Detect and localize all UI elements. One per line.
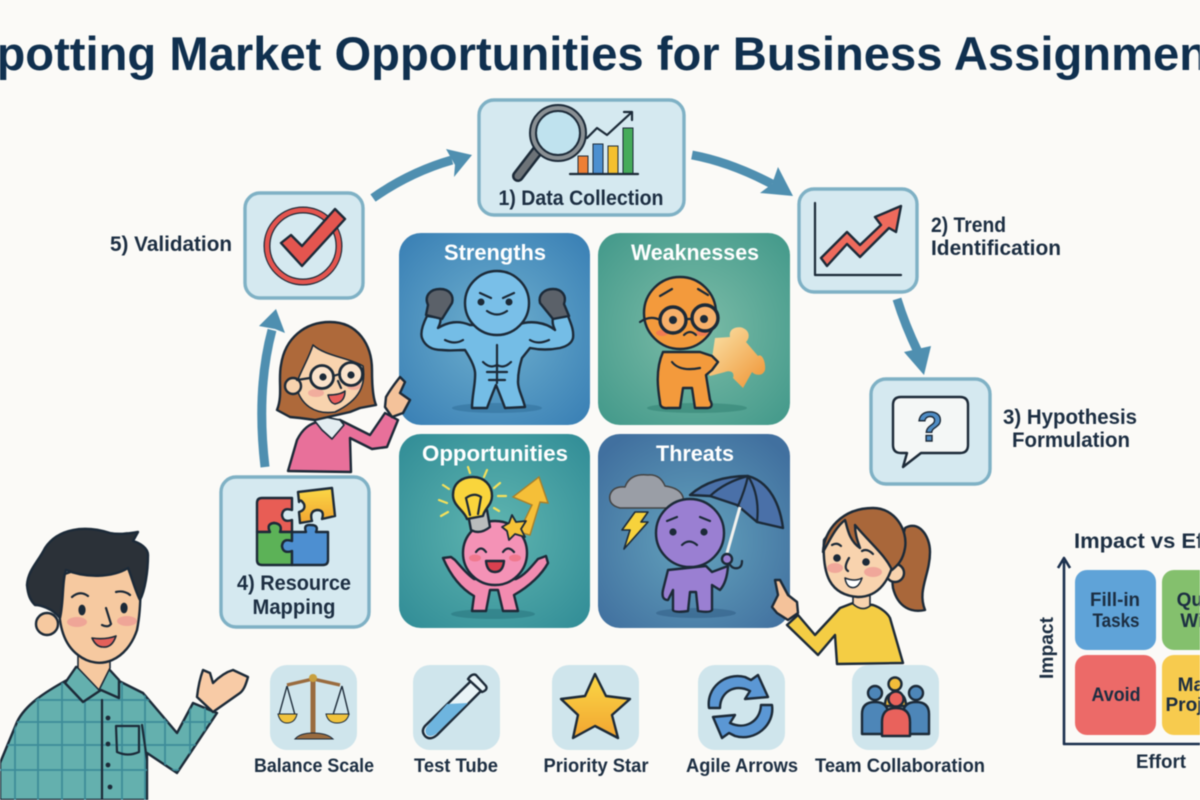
arrow: trend identification to hypothesis	[897, 299, 931, 375]
panel: step 3 hypothesis formulation	[871, 379, 990, 484]
heading: Threats	[656, 441, 734, 466]
character: woman with ponytail pointing	[772, 508, 930, 664]
label: team collaboration: Team Collaboration	[815, 756, 985, 777]
icon tile: test tube	[413, 665, 500, 750]
sweater	[787, 603, 903, 664]
label: step 3	[1003, 406, 1137, 452]
arrow: data collection to trend identification	[692, 155, 793, 196]
character: pink figure with bulb, star, arrow	[439, 467, 548, 619]
panel: step 2 trend identification	[799, 189, 917, 292]
icon: magnifying glass	[518, 108, 583, 176]
cell: fill-in tasks: Tasks	[1092, 611, 1140, 632]
character: purple figure with storm and umbrella	[610, 475, 783, 618]
cell: major projects	[1162, 655, 1200, 735]
label: agile arrows: Agile Arrows	[686, 756, 798, 777]
hand	[385, 377, 410, 417]
hand	[197, 670, 248, 712]
panel: threats	[598, 434, 790, 628]
icon tile: agile arrows	[698, 665, 785, 750]
plaid lines	[0, 680, 220, 800]
step label: Mapping	[252, 596, 336, 619]
character: muscular blue figure	[421, 271, 573, 413]
shirt	[0, 680, 217, 800]
label: step 5: 5) Validation	[110, 233, 232, 256]
cell: avoid	[1075, 655, 1156, 735]
axis label: effort: Effort	[1136, 752, 1187, 773]
icon: rising trend arrow	[815, 203, 901, 275]
icon: question speech bubble: ?	[917, 403, 943, 450]
label: balance scale: Balance Scale	[254, 756, 374, 777]
step label	[237, 572, 351, 619]
icon tile: balance scale	[270, 665, 357, 750]
label: priority star: Priority Star	[544, 756, 649, 777]
axes	[1058, 558, 1200, 744]
icon: umbrella	[690, 476, 783, 568]
character: man in plaid shirt	[0, 529, 248, 800]
label: step 2: Identification	[931, 237, 1061, 260]
icon tile: priority star	[552, 665, 639, 750]
character: orange figure with glasses and puzzle piece	[640, 277, 765, 413]
face	[296, 345, 364, 413]
icon: red check mark	[267, 209, 345, 282]
fists with wrist bands	[426, 289, 452, 319]
icon: storm cloud	[610, 475, 683, 508]
icon: growth arrow	[513, 477, 548, 535]
sweater and arm	[288, 413, 398, 472]
puzzle piece	[706, 327, 765, 388]
panel: step 1 data collection	[479, 100, 684, 215]
cell: quick wins	[1162, 570, 1200, 650]
heading: Weaknesses	[631, 240, 759, 265]
collar	[65, 667, 119, 702]
icon: bar chart with trend line	[570, 112, 638, 174]
panel: step 5 validation	[245, 193, 363, 298]
panel: strengths	[399, 233, 590, 425]
face	[59, 565, 141, 663]
heading: Opportunities	[422, 441, 568, 466]
hair	[27, 529, 148, 618]
panel: weaknesses	[598, 233, 790, 425]
heading: Strengths	[444, 240, 546, 265]
label: step 3: Formulation	[1012, 429, 1130, 452]
icon: four-colour jigsaw puzzle	[257, 488, 335, 565]
icon: star	[502, 515, 526, 540]
cell: fill-in tasks: Fill-in	[1090, 590, 1140, 611]
face	[824, 520, 894, 597]
arrow: validation to data collection	[373, 149, 472, 198]
body	[663, 566, 728, 612]
panel: step 4 resource mapping	[221, 477, 369, 627]
hair	[823, 508, 905, 570]
cell: avoid: Avoid	[1092, 685, 1140, 706]
step label: 1) Data Collection	[498, 187, 664, 210]
hand	[772, 580, 798, 620]
panel: impact vs effort matrix	[1037, 530, 1200, 773]
label: step 3: 3) Hypothesis	[1003, 406, 1137, 429]
icon: lightning bolt	[622, 512, 648, 549]
label: step 2	[931, 214, 1061, 260]
axis label: impact: Impact	[1037, 616, 1058, 679]
neck	[78, 655, 110, 690]
cell: fill-in tasks	[1075, 570, 1156, 650]
step label: 4) Resource	[237, 572, 351, 595]
hair	[277, 322, 376, 420]
body	[443, 556, 548, 611]
label: test tube: Test Tube	[414, 756, 498, 777]
icon tile: team collaboration	[852, 665, 939, 750]
arrow: resource mapping to validation	[259, 309, 285, 467]
icon: light bulb	[439, 467, 506, 532]
character: woman with glasses pointing	[277, 322, 410, 472]
ponytail	[892, 526, 930, 611]
label: step 2: 2) Trend	[931, 214, 1006, 237]
panel: opportunities	[399, 434, 590, 628]
